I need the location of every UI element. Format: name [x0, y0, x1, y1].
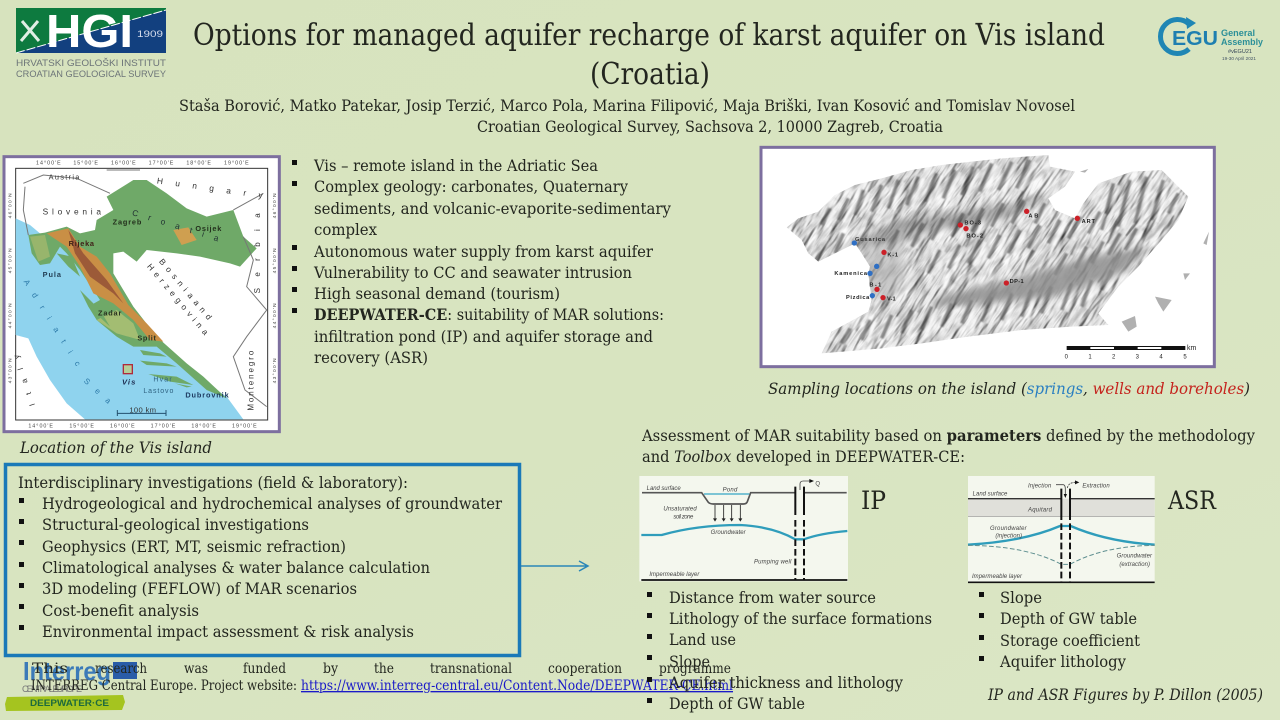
logo: Croatian Geological Survey: CROATIAN GEOLOGICAL SURVEY	[16, 69, 167, 80]
text: MAR suitability assessment intro	[641, 426, 1255, 466]
bullet list: island context	[292, 156, 671, 367]
place names: S e r b i a	[253, 213, 262, 293]
Croatia landmass	[28, 180, 257, 398]
bullet list: island context: sediments, and volcanic-evaporite-sedimentary	[314, 199, 671, 218]
coordinate labels: 15°00'E	[69, 423, 94, 429]
place names: Pula	[43, 270, 62, 279]
authors and affiliation: Staša Borović, Matko Patekar, Josip Terzić, Marco Pola, Marina Filipović, Maja Briški, Ivan Kosović and Tomislav Novosel	[179, 96, 1075, 115]
site labels: AB	[1028, 213, 1038, 219]
text: funding acknowledgement: programme	[659, 661, 731, 677]
diagram labels: Pumping well	[754, 559, 792, 565]
coordinate labels: 14°00'E	[36, 161, 61, 167]
diagram labels: Q	[815, 481, 820, 487]
place names: H e r z e g o v i n a	[145, 262, 211, 337]
diagram labels: soil zone	[673, 514, 694, 520]
coordinate labels: 15°00'E	[73, 161, 98, 167]
logo: Interreg Central Europe DEEPWATER-CE: DEEPWATER·CE	[30, 698, 109, 709]
bullet list: IP parameters: Land use	[669, 630, 736, 649]
logo: EGU General Assembly: EGU	[1172, 28, 1218, 50]
coordinate labels: 17°00'E	[149, 161, 174, 167]
title: Options for managed aquifer recharge of karst aquifer on Vis island	[193, 18, 1105, 52]
diagram labels: Groundwater	[990, 526, 1028, 532]
title	[193, 18, 1105, 91]
bullet list: IP parameters: Slope	[669, 652, 710, 671]
caption: sampling locations: Sampling locations on the island (springs, wells and boreholes)	[768, 379, 1250, 398]
diagram labels: Pond	[723, 488, 738, 494]
coordinate labels: 14°00'E	[28, 423, 53, 429]
site labels: Pizdica	[846, 295, 870, 301]
map scale: 0	[1065, 355, 1069, 361]
islands	[57, 253, 193, 387]
text: funding acknowledgement: INTERREG Central Europe. Project website:	[31, 678, 297, 694]
place names: C r o a t i a	[131, 207, 220, 243]
bullet list: island context: Complex geology: carbonates, Quaternary	[314, 177, 628, 196]
map scale: km	[1187, 345, 1196, 352]
map scale: 5	[1183, 355, 1187, 361]
place names: S l o v e n i a	[43, 206, 101, 216]
logo: EGU General Assembly	[1160, 17, 1263, 61]
bullet list: island context: recovery (ASR)	[314, 348, 428, 367]
logo: Croatian Geological Survey	[16, 5, 167, 80]
coordinate labels: 16°00'E	[111, 161, 136, 167]
diagram labels: (extraction)	[1119, 562, 1150, 568]
diagram labels: Injection	[1028, 483, 1052, 489]
map scale: 3	[1136, 355, 1140, 361]
site labels	[834, 213, 1096, 302]
place names: Austria	[49, 172, 80, 181]
place names: Zadar	[98, 309, 121, 318]
diagram labels: Impermeable layer	[649, 572, 700, 578]
bullet list: island context: Autonomous water supply from karst aquifer	[313, 242, 653, 261]
panel: interdisciplinary investigations: Climatological analyses & water balance calculation	[42, 558, 430, 577]
authors and affiliation: Croatian Geological Survey, Sachsova 2, 10000 Zagreb, Croatia	[477, 117, 943, 136]
place names: B o s n i a a n d	[157, 257, 214, 322]
bullet list: IP parameters: Lithology of the surface formations	[669, 609, 932, 628]
text: MAR suitability assessment intro: and Toolbox developed in DEEPWATER-CE:	[642, 447, 965, 466]
panel: interdisciplinary investigations	[6, 464, 520, 656]
text: funding acknowledgement: funded	[243, 661, 286, 677]
logo: EGU General Assembly: General	[1221, 28, 1255, 38]
site labels: DP-1	[1010, 279, 1024, 285]
text: funding acknowledgement: https://www.interreg-central.eu/Content.Node/DEEPWATER-CE.html	[301, 678, 733, 694]
bullet list: IP parameters: Depth of GW table	[669, 694, 805, 713]
place names: Vis	[122, 378, 135, 387]
panel: interdisciplinary investigations: Cost-benefit analysis	[42, 601, 199, 620]
label: ASR: ASR	[1167, 486, 1217, 515]
coordinate labels	[7, 161, 278, 429]
bullet list: ASR parameters: Aquifer lithology	[999, 652, 1126, 671]
logo: Interreg Central Europe DEEPWATER-CE: Interreg	[23, 656, 111, 686]
diagram labels: (injection)	[995, 533, 1022, 539]
diagram: aquifer storage and recovery (ASR)	[968, 476, 1155, 582]
logo: Croatian Geological Survey: HRVATSKI GEOLOŠKI INSTITUT	[16, 58, 166, 69]
site labels: ART	[1082, 219, 1096, 225]
panel: interdisciplinary investigations: Interdisciplinary investigations (field & laboratory):	[18, 473, 408, 492]
wells and boreholes	[874, 209, 1080, 300]
bullet list: island context: Vulnerability to CC and seawater intrusion	[313, 263, 632, 282]
place names: Dubrovnik	[185, 390, 230, 399]
borders	[23, 170, 267, 407]
text: funding acknowledgement: was	[184, 661, 208, 677]
site labels: BO-2	[966, 234, 983, 240]
text: funding acknowledgement: the	[374, 661, 394, 677]
panel: interdisciplinary investigations: 3D modeling (FEFLOW) of MAR scenarios	[42, 579, 357, 598]
text: funding acknowledgement: This	[32, 661, 68, 677]
bullet list: island context: High seasonal demand (tourism)	[314, 284, 560, 303]
bullet list: IP parameters	[647, 588, 932, 713]
diagram labels	[972, 483, 1153, 580]
site labels: BO-3	[964, 220, 981, 226]
bullet list: island context: infiltration pond (IP) and aquifer storage and	[314, 327, 653, 346]
site labels: Gusarica	[855, 237, 886, 243]
text: funding acknowledgement	[31, 661, 733, 694]
diagram labels	[647, 481, 820, 578]
diagram labels: Impermeable layer	[972, 574, 1023, 580]
text: MAR suitability assessment intro: Assessment of MAR suitability based on parameters defined by the methodology	[641, 426, 1255, 445]
diagram labels: Groundwater	[1117, 553, 1153, 559]
place names: Lastovo	[143, 388, 173, 395]
coordinate labels: 18°00'E	[186, 161, 211, 167]
coordinate labels: 45°00'N	[272, 248, 278, 273]
coordinate labels: 19°00'E	[232, 423, 257, 429]
bullet list: island context: Vis – remote island in the Adriatic Sea	[313, 156, 598, 175]
panel: interdisciplinary investigations: Geophysics (ERT, MT, seismic refraction)	[42, 537, 346, 556]
place names: Split	[137, 334, 157, 343]
text: funding acknowledgement: by	[323, 661, 338, 677]
map scale: 4	[1159, 355, 1163, 361]
text: funding acknowledgement: transnational	[430, 661, 512, 677]
coordinate labels: 45°00'N	[7, 248, 13, 273]
scale bar	[117, 410, 166, 416]
map: location of Vis in Croatia	[4, 157, 279, 432]
bullet list: ASR parameters: Storage coefficient	[1000, 631, 1141, 650]
logo: Interreg Central Europe DEEPWATER-CE: CENTRAL EUROPE	[22, 684, 82, 694]
coordinate labels: 46°00'N	[7, 193, 13, 218]
text: funding acknowledgement: cooperation	[548, 661, 622, 677]
mountain relief	[47, 228, 163, 342]
coordinate labels: 44°00'N	[7, 303, 13, 328]
panel: interdisciplinary investigations: Structural-geological investigations	[42, 515, 309, 534]
diagram labels: Aquitard	[1027, 507, 1053, 513]
bullet list: ASR parameters: Depth of GW table	[1000, 609, 1137, 628]
logo: EGU General Assembly: Assembly	[1221, 37, 1263, 47]
diagram labels: Groundwater	[711, 530, 747, 536]
panel: interdisciplinary investigations: Environmental impact assessment & risk analysis	[42, 622, 414, 641]
place names: H u n g a r y	[156, 175, 264, 200]
logo: Croatian Geological Survey: 1909	[137, 29, 163, 40]
logo: EGU General Assembly: 19-30 April 2021	[1222, 56, 1257, 61]
place names: A d r i a t i c	[22, 278, 82, 368]
place names: I t a l y	[12, 354, 37, 407]
place names: 100 km	[129, 405, 156, 414]
bullet list: IP parameters: Distance from water source	[669, 588, 876, 607]
authors and affiliation	[179, 96, 1075, 136]
Vis locator	[123, 365, 132, 374]
coordinate labels: 44°00'N	[272, 303, 278, 328]
diagram labels: Land surface	[973, 491, 1008, 497]
coordinate labels: 46°00'N	[272, 193, 278, 218]
bullet list: ASR parameters	[979, 588, 1141, 671]
arrow: investigations to assessment	[521, 561, 588, 571]
coordinate labels: 43°00'N	[272, 358, 278, 383]
site labels: K-1	[887, 252, 898, 258]
place names: Osijek	[195, 224, 222, 233]
diagram: infiltration pond (IP)	[639, 476, 848, 581]
sea	[16, 218, 243, 419]
panel: interdisciplinary investigations: Hydrogeological and hydrochemical analyses of groundwater	[42, 494, 502, 513]
coordinate labels: 19°00'E	[224, 161, 249, 167]
site labels: Kamenica	[834, 271, 868, 277]
coordinate labels: 16°00'E	[110, 423, 135, 429]
springs	[852, 240, 879, 298]
place names	[12, 172, 264, 414]
place names: Zagreb	[113, 217, 142, 226]
coordinate labels: 43°00'N	[7, 358, 13, 383]
bullet list: island context: DEEPWATER-CE: suitability of MAR solutions:	[314, 305, 664, 324]
map: sampling locations on Vis island	[760, 146, 1216, 368]
island hillshade	[787, 155, 1188, 354]
diagram labels: Extraction	[1082, 483, 1110, 489]
caption: location of the Vis island: Location of the Vis island	[19, 438, 212, 457]
logo: Interreg Central Europe DEEPWATER-CE	[5, 656, 137, 711]
logo: EGU General Assembly: #vEGU21	[1228, 49, 1252, 55]
logo: Croatian Geological Survey: HGI	[46, 5, 133, 57]
place names: Rijeka	[69, 239, 95, 248]
label: IP: IP	[861, 486, 886, 515]
map scale: 2	[1112, 355, 1116, 361]
map scale	[1065, 345, 1196, 361]
place names: Montenegro	[246, 350, 255, 411]
coordinate labels: 18°00'E	[191, 423, 216, 429]
site labels: B-1	[869, 282, 881, 288]
place names: S e a	[82, 376, 113, 406]
map scale: 1	[1088, 355, 1092, 361]
diagram labels: Land surface	[647, 486, 681, 492]
text: funding acknowledgement: research	[95, 661, 147, 677]
title: (Croatia)	[590, 57, 710, 91]
coordinate labels: 17°00'E	[151, 423, 176, 429]
diagram labels: Unsaturated	[663, 507, 697, 513]
site labels: V-1	[887, 296, 896, 302]
bullet list: ASR parameters: Slope	[1000, 588, 1042, 607]
bullet list: island context: complex	[314, 220, 377, 239]
bullet list: IP parameters: Aquifer thickness and lithology	[668, 673, 903, 692]
place names: Hvar	[153, 377, 172, 384]
offshore islets	[1080, 169, 1209, 332]
